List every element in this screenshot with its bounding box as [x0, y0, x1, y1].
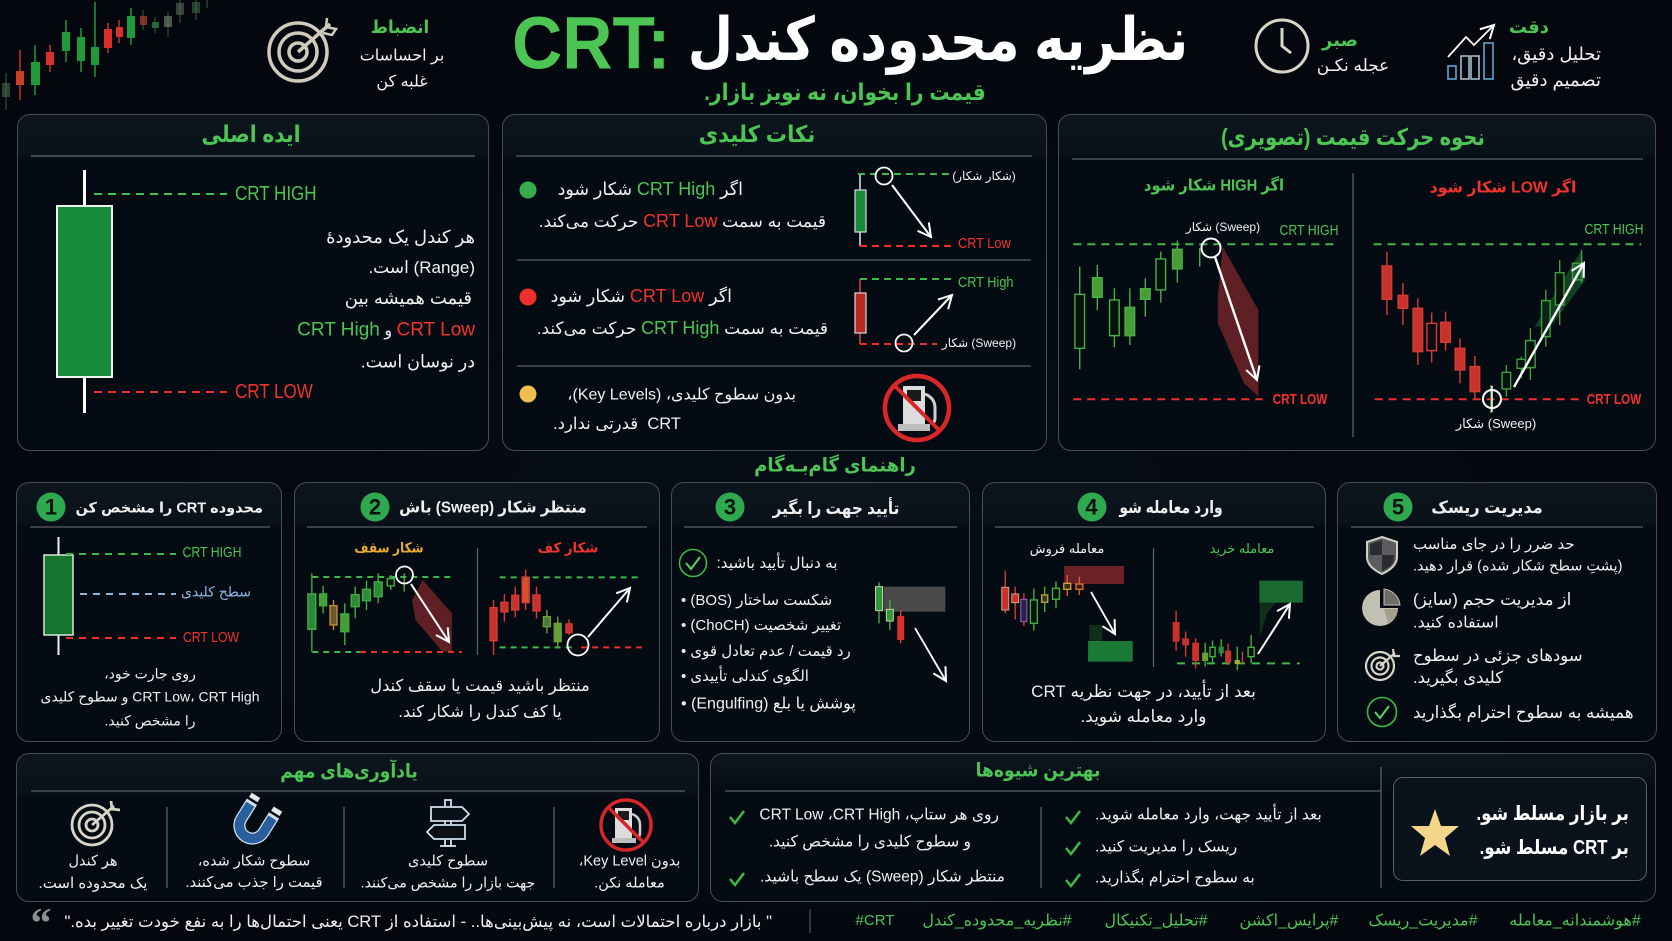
step number 4: 4 — [1085, 494, 1098, 520]
panel: step 3: شکست ساختار (BOS) • — [681, 592, 832, 609]
step number 5: 5 — [1392, 494, 1404, 520]
panel: key points: CRT Low — [958, 235, 1011, 252]
step number 3 — [716, 492, 744, 522]
point 2 text — [537, 286, 828, 338]
text: " بازار درباره احتمالات است، نه پیش‌بینی‌ها.. - استفاده از CRT یعنی احتمال‌ها را به نفع خودت تغییر بده." — [64, 912, 772, 931]
text: #پرایس_اکشن — [1240, 912, 1338, 929]
panel: best practices: روی هر ستاپ، CRT High‏، ‏CRT Low — [759, 807, 999, 824]
accuracy text — [1509, 17, 1601, 90]
panel: key points: (Sweep) شکار — [942, 336, 1016, 350]
panel: step 3: تغییر شخصیت (ChoCH) • — [681, 617, 841, 634]
step 4 description — [1031, 680, 1256, 726]
panel: main idea: (Range) است. — [368, 258, 475, 277]
text: #تحلیل_تکنیکال — [1104, 912, 1208, 929]
confirmation list — [681, 592, 856, 712]
panel: important reminders: هر کندل — [68, 853, 118, 869]
callout: master the market — [1393, 777, 1647, 881]
icon: target — [72, 801, 120, 845]
step 1 title: محدوده CRT را مشخص کن — [75, 500, 263, 516]
panel: step 5 — [1337, 482, 1657, 742]
check marks — [730, 811, 1080, 886]
chart: ceiling sweep — [308, 566, 462, 652]
icon: pie — [1362, 589, 1400, 626]
practices left column — [759, 807, 1005, 886]
panel: key points: CRT High — [958, 274, 1014, 291]
reminder captions — [39, 853, 680, 892]
text: تصمیم دقیق — [1510, 70, 1601, 90]
step number 2 — [360, 492, 390, 522]
panel: step 3 — [671, 482, 970, 742]
hashtags — [856, 912, 1641, 930]
panel: important reminders: معامله نکن. — [594, 875, 665, 891]
text: بر احساسات — [360, 47, 444, 64]
panel: step 4: وارد معامله شوید. — [1081, 707, 1206, 726]
text: #هوشمندانه_معامله — [1509, 912, 1641, 929]
panel: best practices: به سطوح احترام بگذارید. — [1095, 870, 1255, 887]
panel: step 3: رد قیمت / عدم تعادل قوی • — [681, 643, 851, 660]
label: bottom sweep: شکار کف — [538, 540, 598, 556]
panel: step 1: CRT High‏ ،‏CRT Low و سطوح کلیدی — [41, 689, 259, 705]
candle diagram — [57, 170, 227, 413]
title — [512, 2, 1188, 85]
panel: key points: اگر CRT Low شکار شود — [551, 286, 732, 306]
panel: key points: بدون سطوح کلیدی، (Key Levels)، — [567, 386, 796, 403]
step number 3: 3 — [724, 494, 736, 520]
chart: confirmation — [876, 582, 946, 681]
panel: step 1: CRT HIGH — [182, 544, 242, 561]
panel: best practices — [710, 753, 1656, 902]
chart labels — [1185, 220, 1644, 431]
panel: step 5: حد ضرر را در جای مناسب — [1413, 536, 1575, 553]
panel: step 5: همیشه به سطوح احترام بگذارید — [1413, 703, 1634, 722]
risk management text — [1413, 536, 1634, 722]
text: تحلیل دقیق، — [1511, 44, 1601, 64]
mini diagram: high sweep — [855, 168, 952, 246]
mini diagram: low sweep — [855, 279, 952, 352]
callout: master the market: بر بازار مسلط شو. — [1476, 803, 1629, 825]
candle levels diagram — [44, 537, 176, 655]
chart: low sweep — [1374, 244, 1641, 413]
step number 4 — [1077, 492, 1106, 522]
heading: price movement: نحوه حرکت قیمت (تصویری) — [1221, 124, 1485, 150]
panel: key points: CRT قدرتی ندارد. — [553, 415, 681, 433]
panel: best practices: و سطوح کلیدی را مشخص کنید. — [769, 834, 971, 851]
confirmation lead: به دنبال تأیید باشید: — [716, 555, 838, 572]
step 3 title: تأیید جهت را بگیر — [773, 499, 899, 518]
panel: important reminders: سطوح شکار شده، — [198, 853, 310, 869]
callout: master the market: بر CRT مسلط شو. — [1480, 837, 1629, 859]
heading: main idea: ایده اصلی — [201, 121, 301, 147]
panel: important reminders: بدون Key Level، — [579, 853, 680, 869]
chart: buy trade — [1173, 581, 1303, 670]
icon: check — [1368, 698, 1396, 726]
panel: step 1: را مشخص کنید. — [105, 713, 195, 729]
panel: price movement: (Sweep) شکار — [1456, 416, 1536, 431]
subtitle: قیمت را بخوان، نه نویز بازار. — [704, 79, 986, 105]
text: غلبه کن — [376, 73, 428, 90]
point 1 text — [539, 179, 826, 231]
mini labels — [941, 169, 1016, 350]
panel: price movement: CRT LOW — [1273, 391, 1327, 408]
panel: step 1: سطح کلیدی — [181, 584, 251, 600]
icon: star — [1411, 809, 1459, 856]
level labels — [181, 544, 251, 646]
panel: important reminders — [16, 753, 699, 902]
icon: no fuel — [885, 376, 949, 440]
main idea description — [297, 227, 475, 372]
label: sell trade: معامله فروش — [1030, 541, 1104, 556]
step 2 description — [370, 677, 590, 721]
footer quote — [30, 901, 772, 941]
heading: step by step guide: راهنمای گام‌بـه‌گام — [754, 456, 916, 477]
patience text — [1317, 30, 1389, 75]
text: انضباط — [371, 17, 429, 37]
label: buy trade: معامله خرید — [1210, 541, 1274, 556]
text: #مدیریت_ریسک — [1369, 912, 1477, 929]
step 5 title: مدیریت ریسک — [1431, 498, 1543, 517]
point 3 text — [553, 386, 796, 433]
panel: step 2: منتظر باشید قیمت یا سقف کندل — [370, 677, 590, 695]
panel: step 1 — [16, 482, 282, 742]
icon: shield — [1367, 537, 1397, 574]
label: CRT HIGH: CRT HIGH — [235, 183, 317, 205]
heading: key points: نکات کلیدی — [699, 121, 815, 147]
icon: signpost — [427, 800, 469, 846]
panel: important reminders: یک محدوده است. — [39, 875, 147, 892]
text: عجله نکـن — [1317, 56, 1389, 75]
subheading: if high swept: اگر HIGH شکار شود — [1144, 177, 1284, 194]
panel: key points: (شکار شکار) — [952, 169, 1016, 183]
panel: step 3: پوشش یا بلع (Engulfing) • — [681, 695, 856, 712]
subheading: if low swept: اگر LOW شکار شود — [1430, 179, 1576, 196]
panel: step 2: یا کف کندل را شکار کند. — [398, 703, 562, 721]
discipline text — [360, 17, 444, 90]
callout text — [1476, 803, 1629, 859]
panel: key points: اگر CRT High شکار شود — [558, 179, 743, 199]
label: CRT LOW: CRT LOW — [235, 381, 313, 403]
step 1 description — [41, 666, 259, 729]
panel: best practices: منتظر شکار (Sweep) یک سطح باشید. — [760, 869, 1005, 886]
panel: price movement: (Sweep) شکار — [1186, 220, 1260, 234]
panel: best practices: بعد از تأیید جهت، وارد معامله شوید. — [1095, 807, 1322, 824]
step 4 title: وارد معامله شو — [1119, 498, 1223, 517]
panel: key points: قیمت به سمت CRT Low حرکت می‌کند. — [539, 211, 826, 231]
text: CRT: — [512, 2, 670, 85]
panel: price movement: CRT HIGH — [1279, 222, 1339, 239]
panel: main idea — [17, 114, 489, 451]
heading: best practices: بهترین شیوه‌ها — [976, 761, 1100, 782]
heading: reminders: یادآوری‌های مهم — [280, 762, 418, 783]
icon: check — [680, 550, 706, 576]
step number 1 — [36, 492, 66, 522]
text: #نظریه_محدوده_کندل — [922, 912, 1072, 929]
step number 5 — [1384, 492, 1412, 522]
text: صبر — [1322, 30, 1358, 50]
panel: main idea: هر کندل یک محدودهٔ — [326, 227, 475, 247]
panel: step 2 — [294, 482, 660, 742]
panel: step 3: الگوی کندلی تأییدی • — [681, 668, 809, 685]
panel: main idea: قیمت همیشه بین — [345, 288, 472, 308]
panel: price movement: CRT LOW — [1587, 391, 1641, 408]
panel: step 1: CRT LOW — [183, 629, 239, 646]
text: دقت — [1509, 17, 1549, 37]
panel: step 1: روی جارت خود، — [104, 666, 196, 682]
panel: step 5: از مدیریت حجم (سایز) — [1413, 590, 1571, 609]
icon: no fuel — [601, 800, 651, 850]
practices right column — [1095, 804, 1322, 887]
panel: main idea: CRT Low و CRT High — [297, 320, 475, 341]
panel: important reminders: سطوح کلیدی — [408, 853, 488, 869]
icon: target small — [1366, 649, 1400, 680]
chart: high sweep — [1073, 238, 1335, 399]
chart: sell trade — [1002, 566, 1133, 662]
panel: step 5: استفاده کنید. — [1413, 614, 1499, 631]
text: #CRT — [856, 912, 894, 929]
panel: price movement: CRT HIGH — [1584, 221, 1644, 238]
icon: magnet — [230, 795, 281, 846]
panel: step 5: سودهای جزئی در سطوح — [1413, 647, 1583, 665]
step 2 title: منتظر شکار (Sweep) باش — [399, 499, 587, 516]
panel: best practices: ریسک را مدیریت کنید. — [1095, 839, 1237, 856]
step number 1: 1 — [45, 494, 57, 520]
step number 2: 2 — [369, 494, 381, 520]
panel: step 5: کلیدی بگیرید. — [1413, 669, 1503, 687]
panel: main idea: در نوسان است. — [361, 352, 475, 372]
panel: important reminders: قیمت را جذب می‌کنند. — [185, 875, 323, 891]
panel: key points — [502, 114, 1047, 451]
chart: floor sweep — [490, 569, 642, 656]
panel: step 4: بعد از تأیید، در جهت نظریه CRT — [1031, 682, 1256, 701]
panel: step 5: (پشتِ سطح شکار شده) قرار دهید. — [1413, 558, 1622, 574]
panel: key points: قیمت به سمت CRT High حرکت می‌کند. — [537, 318, 828, 338]
panel: important reminders: جهت بازار را مشخص می‌کنند. — [361, 875, 535, 891]
label: top sweep: شکار سقف — [354, 540, 424, 556]
panel: step 4 — [982, 482, 1326, 742]
text: نظریه محدوده کندل — [688, 6, 1188, 73]
panel: price movement — [1058, 114, 1656, 451]
